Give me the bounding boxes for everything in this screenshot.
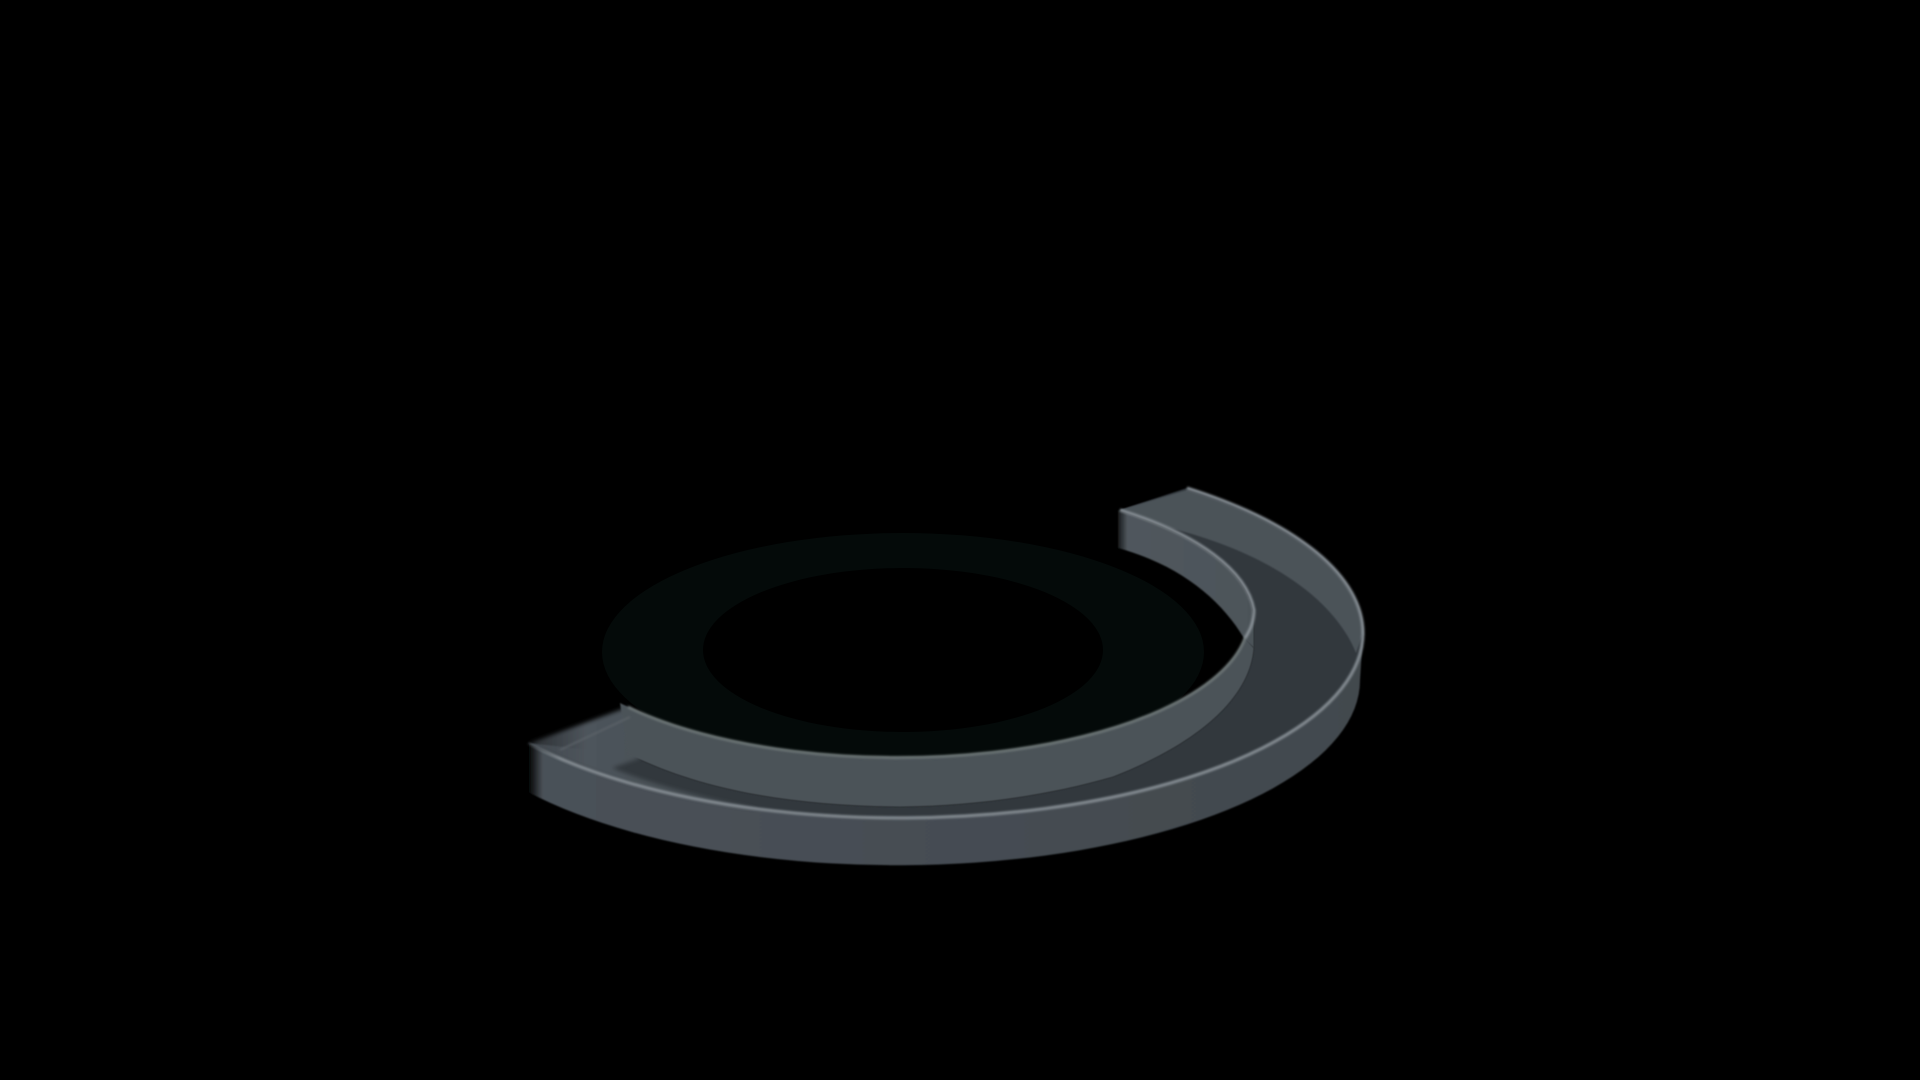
- dark ring platform: [602, 533, 1204, 771]
- outer wall rim highlight: [528, 488, 1363, 818]
- inner wall rim highlight: [628, 510, 1254, 757]
- outer wall front face: [528, 633, 1363, 865]
- left end cap face: [530, 707, 760, 809]
- end cap inner edge line: [560, 717, 630, 750]
- channel floor: [528, 488, 1363, 818]
- inner wall front face: [620, 638, 1254, 807]
- outer wall back face: [1120, 490, 1363, 653]
- inner wall back face: [1118, 510, 1254, 648]
